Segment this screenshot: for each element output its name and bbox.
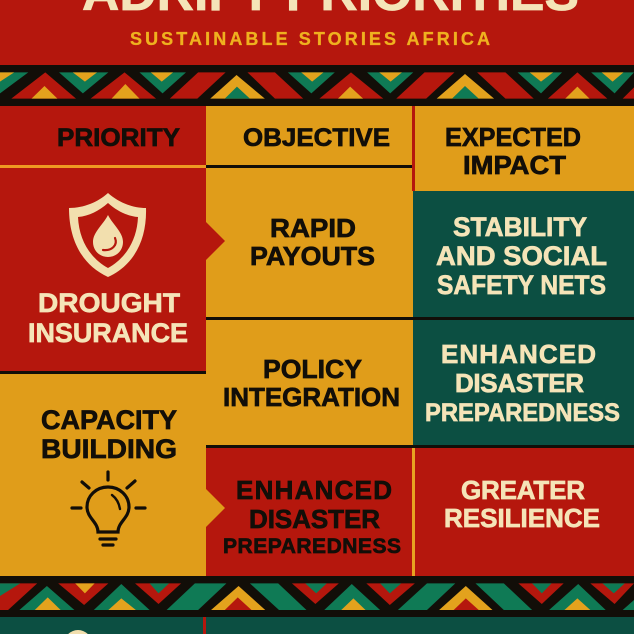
header: expected impact: IMPACT [463, 150, 566, 180]
panel: objective column, red section [206, 447, 413, 576]
panel: priority column, red section [0, 106, 206, 372]
text: enhanced disaster preparedness, impact: PREPAREDNESS [425, 399, 620, 427]
header: objective: OBJECTIVE [243, 124, 390, 152]
top patterned band [0, 65, 634, 106]
subtitle: SUSTAINABLE STORIES AFRICA [130, 29, 490, 49]
header background [0, 0, 634, 66]
text: enhanced disaster preparedness, objective [223, 475, 401, 558]
text: enhanced disaster preparedness, impact: DISASTER [455, 368, 584, 398]
panel: impact column, red section [413, 447, 634, 576]
bottom patterned band [0, 576, 634, 617]
text: rapid payouts: PAYOUTS [250, 241, 375, 271]
header: expected impact: EXPECTED [445, 122, 581, 152]
text: policy integration [223, 354, 400, 412]
panel: objective column, yellow section [206, 106, 413, 447]
panel: priority column, yellow section [0, 372, 206, 576]
text: rapid payouts: RAPID [270, 213, 356, 243]
header: priority: PRIORITY [57, 124, 180, 152]
text: stability and social safety nets: AND SOCIAL [436, 241, 607, 271]
text: policy integration: INTEGRATION [223, 382, 400, 412]
text: capacity building: CAPACITY [41, 405, 177, 435]
text: enhanced disaster preparedness, impact [425, 339, 620, 427]
arrow: drought insurance to rapid payouts [206, 222, 225, 260]
icon: light bulb [72, 472, 145, 545]
text: stability and social safety nets [436, 212, 607, 300]
text: drought insurance: DROUGHT [38, 288, 181, 318]
footer panel [0, 617, 634, 634]
text: capacity building: BUILDING [41, 434, 177, 464]
text: rapid payouts [250, 213, 375, 271]
text: enhanced disaster preparedness, objective: PREPAREDNESS [223, 535, 401, 558]
text: enhanced disaster preparedness, impact: ENHANCED [441, 339, 596, 369]
text: enhanced disaster preparedness, objective: DISASTER [249, 504, 380, 534]
icon: shield with water drop [69, 193, 146, 277]
header: expected impact [445, 122, 581, 180]
text: capacity building [41, 405, 177, 464]
text: drought insurance [28, 288, 188, 348]
text: greater resilience: RESILIENCE [444, 503, 600, 533]
text: stability and social safety nets: SAFETY NETS [437, 270, 606, 300]
panel: impact header [413, 106, 634, 191]
text: enhanced disaster preparedness, objective: ENHANCED [236, 475, 392, 505]
panel: impact column, green section [413, 191, 634, 447]
text: policy integration: POLICY [263, 354, 362, 384]
text: stability and social safety nets: STABILITY [453, 212, 587, 242]
arrow: capacity building to enhanced preparedness [206, 489, 225, 527]
text: drought insurance: INSURANCE [28, 318, 188, 348]
text: greater resilience [444, 475, 600, 533]
text: greater resilience: GREATER [461, 475, 585, 505]
icon: footer circle top [64, 630, 92, 634]
